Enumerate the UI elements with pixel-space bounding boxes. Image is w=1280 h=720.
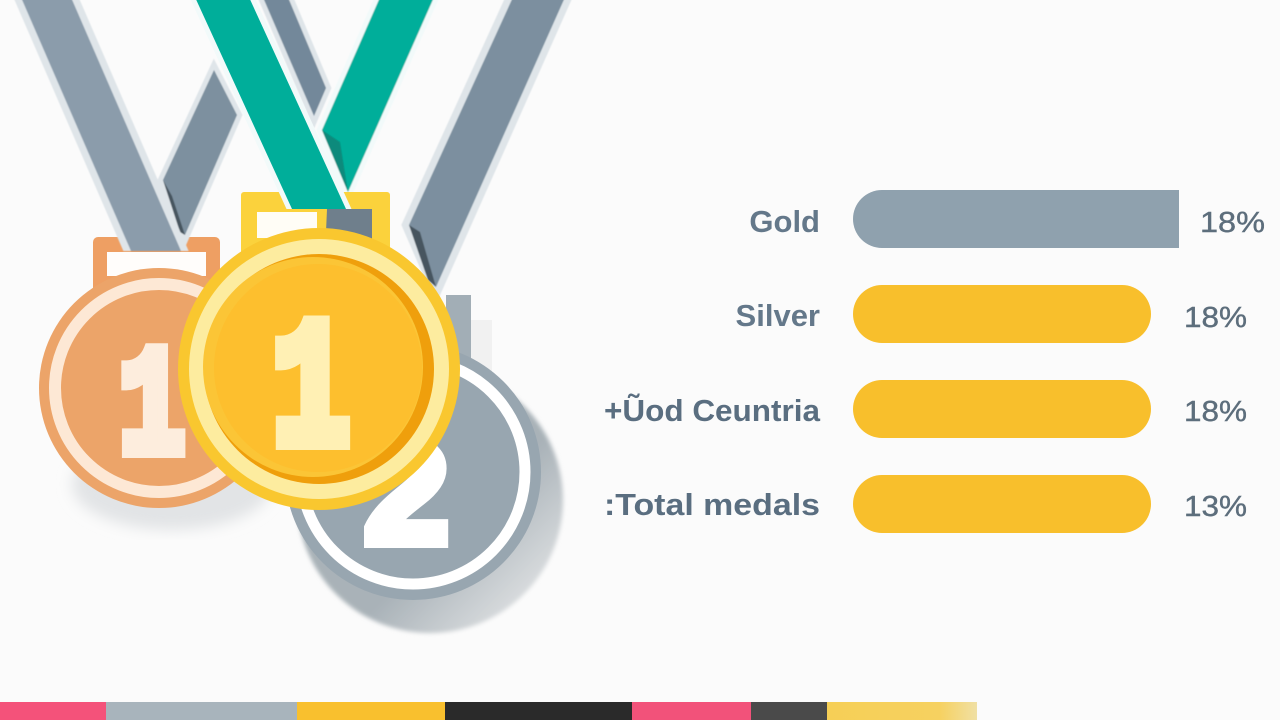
silver loop — [446, 295, 471, 405]
gold inner rim left — [203, 257, 423, 477]
bar chart — [604, 190, 1265, 533]
gold loop opening left — [257, 212, 317, 238]
teal ribbon right shade — [322, 130, 348, 192]
bar: Gold — [853, 190, 1179, 248]
label: Countries: +Ũod Ceuntria — [604, 392, 821, 428]
label: Gold: Gold — [749, 204, 820, 239]
gold loop opening right — [326, 209, 372, 240]
bronze loop opening — [107, 252, 206, 276]
grey ribbon left back shade — [163, 180, 185, 235]
label: Total medals: :Total medals — [604, 487, 820, 522]
bronze disc — [39, 268, 279, 508]
ribbons — [20, 0, 566, 287]
bronze loop — [93, 237, 220, 297]
bronze medal — [39, 252, 279, 530]
label: Silver: Silver — [736, 298, 820, 333]
bronze ring — [55, 284, 263, 492]
medals illustration — [20, 0, 566, 633]
silver ring — [301, 360, 525, 584]
row: Countries — [604, 380, 1247, 438]
row: Silver — [736, 285, 1247, 343]
grey ribbon left front — [20, 0, 181, 251]
gold medal — [178, 0, 460, 510]
value: Countries: 18% — [1184, 396, 1247, 428]
bar: Silver — [853, 285, 1151, 343]
row: Total medals — [604, 475, 1247, 533]
bar: Countries — [853, 380, 1151, 438]
gold inner rim — [204, 254, 434, 484]
silver shadow — [297, 367, 563, 633]
grey ribbon left back — [163, 70, 237, 235]
teal ribbon front — [194, 0, 346, 209]
silver numeral: 2 — [361, 418, 451, 588]
gold pale ring — [189, 239, 449, 499]
gold face — [214, 264, 422, 472]
gold numeral: 1 — [272, 293, 350, 497]
gold disc — [178, 228, 460, 510]
silver medal — [285, 295, 563, 633]
grey ribbon right — [409, 0, 566, 287]
value: Silver: 18% — [1184, 302, 1247, 334]
gold loop — [241, 192, 390, 254]
value: Gold: 18% — [1200, 207, 1265, 239]
bar: Total medals — [853, 475, 1151, 533]
silver loop shadow — [470, 320, 492, 390]
bottom colour strip — [0, 702, 977, 720]
silver disc — [285, 344, 541, 600]
teal ribbon right — [322, 0, 435, 192]
grey ribbon right shade — [409, 225, 436, 287]
value: Total medals: 13% — [1184, 491, 1247, 523]
grey ribbon behind teal — [262, 0, 326, 116]
bronze shadow — [72, 438, 272, 530]
row: Gold — [749, 190, 1265, 248]
bronze numeral: 1 — [119, 325, 185, 498]
